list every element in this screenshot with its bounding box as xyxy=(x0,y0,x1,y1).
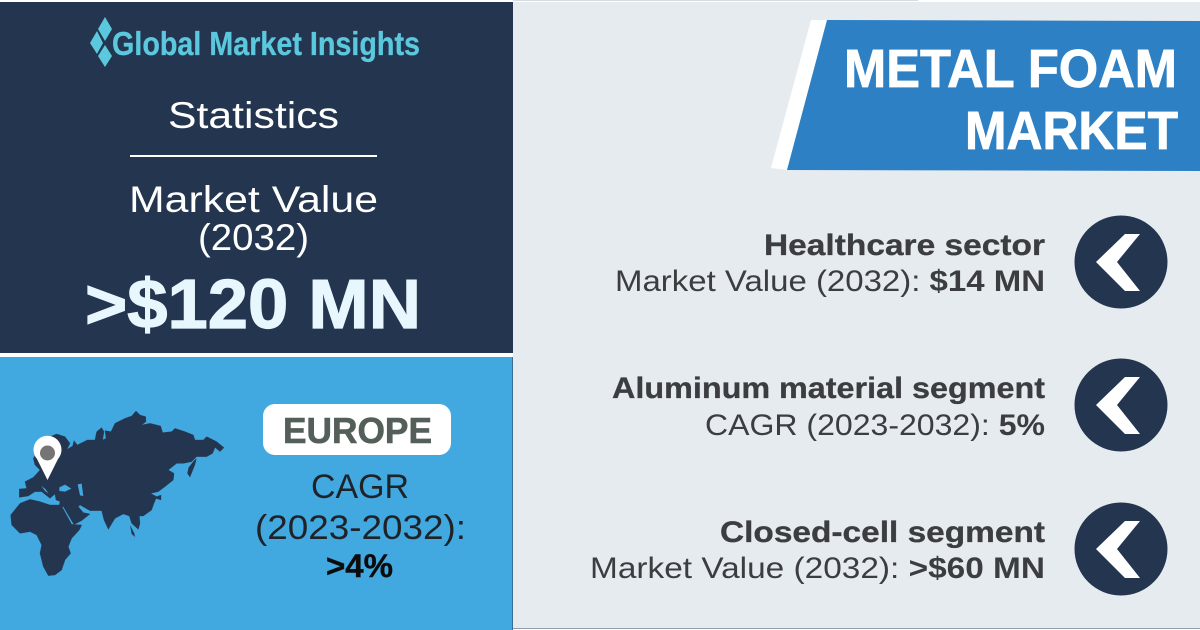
item: aluminum material segment xyxy=(612,358,1168,452)
icon: chevron xyxy=(1074,216,1168,308)
panel: statistics xyxy=(0,2,513,353)
icon: chevron xyxy=(1074,358,1168,452)
panel: europe xyxy=(0,357,513,630)
item: healthcare sector xyxy=(615,216,1168,308)
stat: europe cagr: >4% xyxy=(326,548,393,584)
badge: europe: EUROPE xyxy=(283,410,432,451)
title banner: METAL FOAM xyxy=(844,39,1177,99)
label: market value: Market Value xyxy=(129,179,378,220)
badge: europe xyxy=(263,404,451,455)
stat: market value: >$120 MN xyxy=(85,265,421,343)
title banner xyxy=(771,20,1200,171)
icon: chevron xyxy=(1074,502,1168,596)
item: healthcare sector: Healthcare sector xyxy=(764,229,1045,262)
item: closed-cell segment: Closed-cell segment xyxy=(720,516,1045,549)
icon: location pin xyxy=(34,436,62,480)
title banner: MARKET xyxy=(965,101,1178,161)
item: healthcare sector: Market Value (2032): $14 MN xyxy=(615,265,1045,298)
label: cagr: CAGR xyxy=(311,468,409,506)
logo: Global Market Insights xyxy=(112,25,420,62)
item: aluminum material segment: Aluminum material segment xyxy=(612,372,1045,405)
label: period: (2023-2032): xyxy=(255,509,466,547)
logo xyxy=(90,17,420,67)
label: year: (2032) xyxy=(198,217,309,258)
icon: world map xyxy=(11,411,224,576)
item: closed-cell segment xyxy=(590,502,1168,596)
item: aluminum material segment: CAGR (2023-2032): 5% xyxy=(705,409,1045,442)
heading: statistics: Statistics xyxy=(168,95,339,136)
panel: segments background xyxy=(512,0,1200,630)
item: closed-cell segment: Market Value (2032): >$60 MN xyxy=(590,552,1045,585)
